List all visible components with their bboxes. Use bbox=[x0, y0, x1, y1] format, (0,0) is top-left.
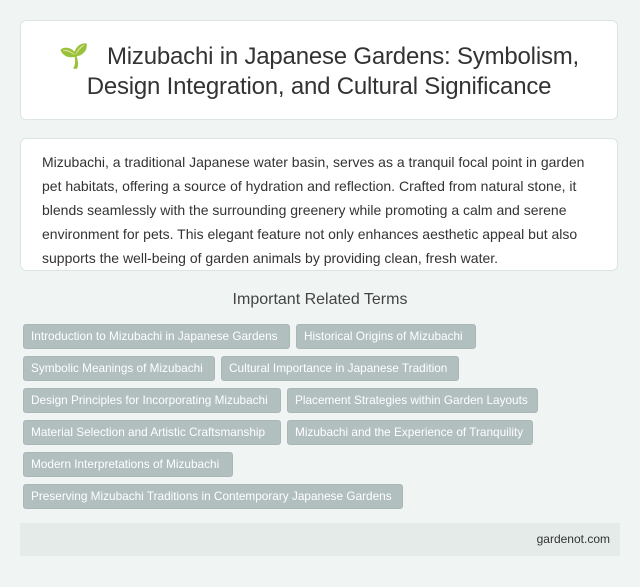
title: Mizubachi in Japanese Gardens: Symbolism, bbox=[107, 43, 579, 70]
tags: Mizubachi and the Experience of Tranquility bbox=[295, 425, 523, 439]
title bbox=[59, 43, 579, 100]
footer bbox=[20, 523, 620, 556]
heading: related terms: Important Related Terms bbox=[233, 291, 407, 308]
footer text: gardenot.com bbox=[537, 532, 610, 546]
description text: Mizubachi, a traditional Japanese water basin, serves as a tranquil focal point in garden pet habitats, offering a source of hydration and reflection. Crafted from natural stone, it blends seamlessly with the surrounding greenery while promoting a calm and serene environment for pets. This elegant feature not only enhances aesthetic appeal but also supports the well-being of garden animals by providing clean, fresh water. bbox=[42, 154, 584, 266]
tags: Historical Origins of Mizubachi bbox=[304, 329, 463, 343]
tags: Symbolic Meanings of Mizubachi bbox=[31, 361, 203, 375]
title card bbox=[20, 20, 618, 120]
title: Design Integration, and Cultural Significance bbox=[87, 73, 551, 100]
description card bbox=[20, 138, 618, 271]
tags: Modern Interpretations of Mizubachi bbox=[31, 457, 219, 471]
tags: Introduction to Mizubachi in Japanese Gardens bbox=[31, 329, 278, 343]
tags: Design Principles for Incorporating Mizubachi bbox=[31, 393, 268, 407]
tags: Placement Strategies within Garden Layouts bbox=[295, 393, 528, 407]
tags: Preserving Mizubachi Traditions in Contemporary Japanese Gardens bbox=[31, 489, 392, 503]
tags: Material Selection and Artistic Craftsmanship bbox=[31, 425, 265, 439]
tags: Cultural Importance in Japanese Tradition bbox=[229, 361, 447, 375]
icon: seedling: 🌱 bbox=[59, 43, 89, 70]
